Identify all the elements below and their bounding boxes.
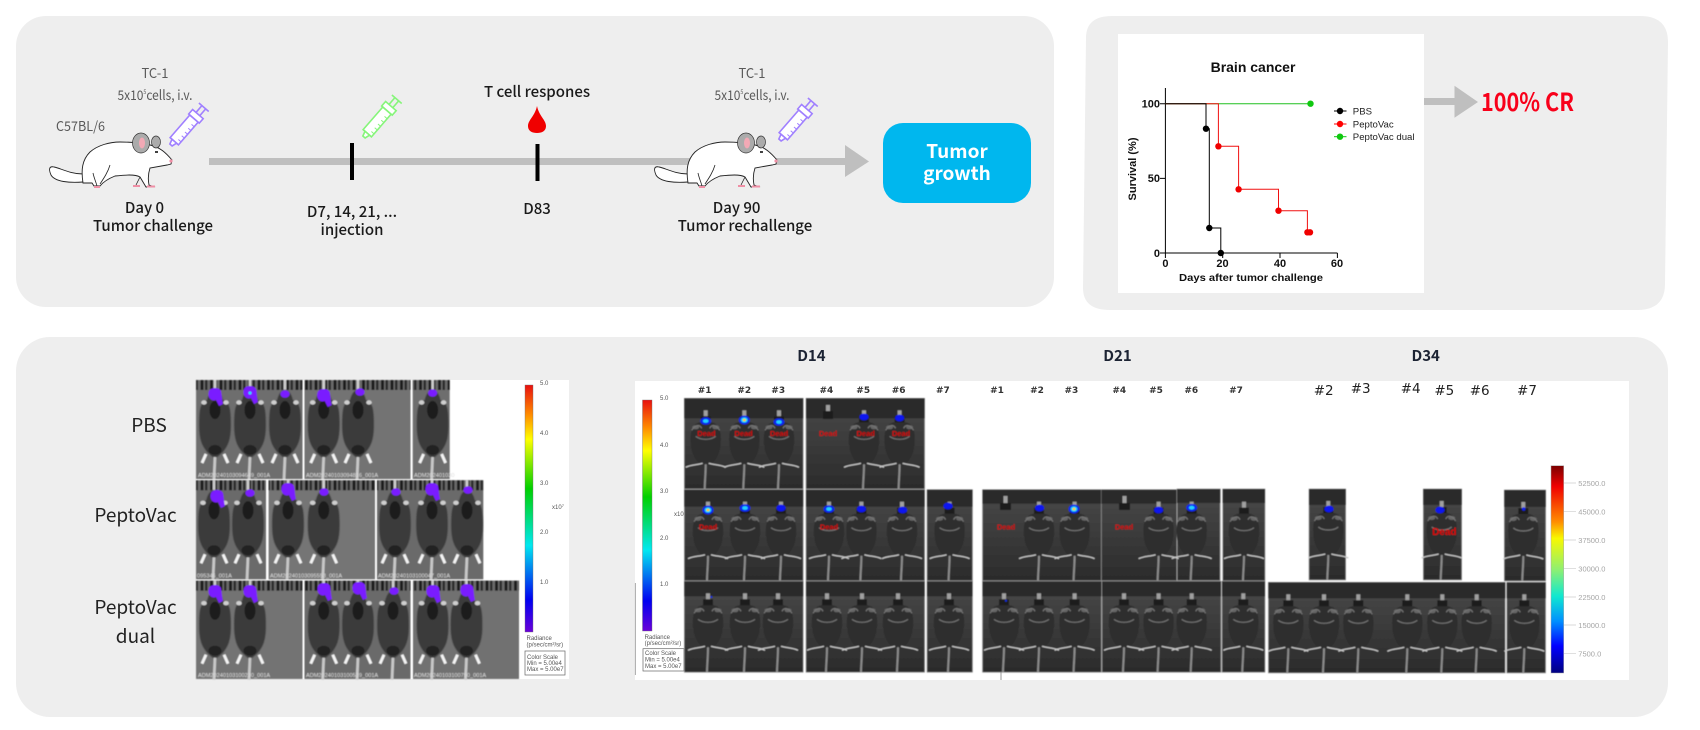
icon: mouse day 0 [50, 133, 173, 187]
color scale: left: 2.0 [660, 536, 669, 542]
icon: blood drop [528, 106, 546, 133]
color scale: radiance: 2.0 [540, 530, 549, 536]
legend: PBS [1353, 106, 1372, 118]
mouse number labels: #4 [1401, 381, 1421, 397]
frames: D14 PeptoVac: Dead [820, 522, 839, 532]
legend: PeptoVac [1353, 120, 1394, 130]
mouse number labels: #2 [1030, 386, 1044, 396]
color scale: right: 45000.0 [1578, 508, 1605, 516]
y tick labels: 50 [1148, 173, 1160, 185]
color scale: left: Max = 5.00e7 [645, 664, 682, 670]
frames: D21 PeptoVac dual [982, 581, 1265, 672]
mouse number labels: #2 [1314, 383, 1334, 399]
y tick labels: 100 [1142, 98, 1160, 110]
label: dose day 0: 5 [143, 87, 146, 96]
mouse number labels: #7 [1517, 383, 1537, 399]
survival chart [1118, 34, 1424, 293]
color scale: right: 52500.0 [1578, 479, 1605, 488]
frames: D21 PeptoVac [982, 489, 1265, 581]
label: day 0: Day 0 [125, 197, 164, 218]
label: day 90: Tumor rechallenge [678, 215, 812, 236]
panel: survival result [1083, 16, 1668, 310]
label: dose day 90: 5 [740, 87, 743, 96]
y axis label: Survival (%) [1127, 137, 1139, 200]
heading: D34: D34 [1411, 345, 1440, 366]
mouse number labels: #6 [892, 386, 906, 396]
label: injection schedule [307, 201, 397, 240]
color scale: radiance: Color Scale [527, 655, 559, 661]
frames: D14 PBS: Dead [770, 429, 789, 438]
legend [1334, 106, 1415, 143]
label: TC-1 day 90: TC-1 [738, 62, 766, 82]
color scale: left: 3.0 [660, 489, 669, 495]
y tick labels: 0 [1154, 248, 1160, 260]
frames: D34 PeptoVac [1308, 489, 1546, 581]
color scale: radiance: 7 [562, 503, 565, 508]
mouse number labels: #3 [1351, 381, 1371, 397]
frames: D14 PeptoVac: Dead [699, 522, 718, 532]
legend: PeptoVac dual [1353, 132, 1415, 143]
mice images: D34 [1268, 489, 1546, 673]
arrow to result [1424, 86, 1478, 118]
mouse number labels: #4 [1112, 386, 1126, 396]
color scale: radiance: Min = 5.00e4 [527, 661, 563, 667]
frames: D14 PBS: Dead [697, 429, 716, 438]
color scale: radiance: Radiance [526, 636, 553, 642]
x axis label: Days after tumor challenge [1179, 272, 1323, 284]
mouse number labels: #3 [1064, 386, 1078, 396]
mouse number labels: #5 [856, 386, 870, 396]
color scale: radiance: (p/sec/cm²/sr) [526, 642, 563, 648]
callout: tumor growth: Tumor [926, 137, 988, 164]
color scale: left: Radiance [645, 635, 671, 641]
label: dose day 90: cells, i.v. [743, 84, 790, 104]
frames: D14 PBS: Dead [734, 429, 753, 438]
group label: PeptoVac dual: PeptoVac [94, 593, 177, 620]
image: longitudinal imaging [635, 381, 1629, 680]
frames: PeptoVac dual row: ADM20240103100750_001A [414, 673, 486, 679]
group label: PeptoVac: PeptoVac [94, 501, 177, 528]
frames: D14 PBS: Dead [857, 429, 875, 438]
x tick labels: 40 [1274, 258, 1286, 270]
mouse number labels: #6 [1470, 383, 1490, 399]
color scale: right [1551, 466, 1605, 673]
group label: PeptoVac dual [94, 593, 177, 649]
x tick labels: 20 [1216, 258, 1229, 270]
icon: purple syringe day 90 [775, 98, 818, 145]
icon: purple syringe day 0 [166, 103, 209, 150]
frames: D14 PBS: Dead [892, 429, 911, 438]
heading: D14: D14 [797, 345, 826, 366]
mouse number labels: #2 [737, 386, 751, 396]
series: PeptoVac dual [1165, 100, 1314, 107]
label: TC-1 day 0: TC-1 [142, 62, 168, 82]
color scale: right: 15000.0 [1578, 621, 1605, 630]
image: day 0 imaging [196, 380, 569, 680]
frames: PeptoVac dual row: ADM20240103100539_001A [306, 673, 378, 679]
color scale: radiance: Max = 5.00e7 [527, 667, 564, 673]
color scale: left: Min = 5.00e4 [645, 658, 681, 664]
label: dose day 0: cells, i.v. [146, 84, 192, 104]
color scale: left: 1.0 [660, 582, 669, 588]
mouse number labels: #3 [771, 386, 785, 396]
color scale: radiance: 4.0 [540, 431, 549, 437]
frames: PeptoVac row: 095346_001A [197, 574, 232, 580]
frames: PeptoVac row [196, 480, 483, 580]
frames: PeptoVac dual row: ADM20240103100230_001A [198, 673, 270, 679]
result: 100% CR: 100% CR [1481, 83, 1574, 119]
mouse number labels: #6 [1184, 386, 1198, 396]
color scale: left: Color Scale [645, 651, 677, 657]
frames: PeptoVac row: ADM20240103100047_001A [378, 574, 450, 580]
series: PBS [1165, 104, 1224, 256]
mouse number labels [698, 381, 1537, 399]
label: day 90: Day 90 [713, 197, 760, 218]
mouse number labels: #5 [1434, 383, 1454, 399]
label: day 90 [678, 197, 812, 236]
group label: PeptoVac dual: dual [116, 622, 155, 649]
color scale: radiance [525, 381, 565, 675]
label: strain: C57BL/6 [56, 115, 105, 135]
color scale: radiance: x10 [552, 505, 562, 511]
frames: PBS row [196, 380, 454, 479]
axes [1160, 88, 1337, 258]
mouse number labels: #7 [1229, 386, 1243, 396]
heading: D21: D21 [1103, 345, 1132, 366]
frames: D14 PBS [684, 398, 925, 489]
mouse number labels: #4 [819, 386, 833, 396]
mice images: D21 [982, 489, 1265, 672]
group label: PBS: PBS [131, 411, 167, 438]
x tick labels: 60 [1331, 258, 1343, 270]
callout: tumor growth: growth [923, 159, 991, 186]
color scale: left: 4.0 [660, 443, 669, 449]
color scale: right: 22500.0 [1578, 593, 1605, 602]
mouse number labels: #1 [698, 386, 712, 396]
frames: PeptoVac row: ADM20240103095553_001A [270, 574, 342, 580]
chart title: Brain cancer [1211, 59, 1296, 75]
color scale: left: 5.0 [660, 396, 669, 402]
mouse number labels: #7 [936, 386, 950, 396]
y tick labels [1142, 98, 1160, 260]
frames: D34 PeptoVac dual [1268, 582, 1546, 673]
mice images [196, 380, 519, 680]
frames: PBS row: ADM202401030 [414, 473, 454, 479]
label: D83: D83 [523, 198, 551, 219]
series: PeptoVac [1165, 104, 1313, 236]
label: dose day 0: 5x10 [118, 84, 147, 104]
tick: T cell response [536, 144, 540, 181]
frames: D14 PeptoVac [684, 490, 972, 581]
frames: D21 PeptoVac: Dead [1115, 522, 1134, 532]
label: T cell response: T cell respones [484, 81, 590, 102]
color scale: right: 37500.0 [1578, 536, 1605, 545]
x tick labels [1162, 258, 1343, 270]
color scale: left: (p/sec/cm²/sr) [645, 641, 681, 647]
label: dose day 90: 5x10 [714, 84, 744, 104]
mouse number labels: #5 [1149, 386, 1163, 396]
frames: D14 PBS: Dead [819, 429, 838, 438]
panel: experiment timeline [16, 16, 1054, 307]
label: injection schedule: injection [321, 219, 383, 240]
tick: injection [350, 143, 354, 180]
label: injection schedule: D7, 14, 21, ... [307, 201, 397, 222]
frames: PeptoVac dual row [196, 581, 519, 680]
icon: green syringe [359, 95, 402, 142]
frames: PBS row: ADM20240103094816_001A [306, 473, 378, 479]
color scale: radiance: 5.0 [540, 381, 549, 387]
color scale: radiance: 1.0 [540, 580, 549, 586]
timeline arrow [209, 145, 869, 177]
mouse number labels: #1 [990, 386, 1004, 396]
frames: D14 PeptoVac dual [684, 581, 972, 672]
mice images: D14 [684, 398, 972, 672]
frames: D21 PeptoVac: Dead [997, 522, 1016, 532]
color scale: left: x10 [674, 512, 684, 518]
color scale: radiance: 3.0 [540, 481, 549, 487]
color scale: right: 30000.0 [1578, 564, 1605, 574]
panel: bioluminescence imaging [16, 337, 1668, 717]
x tick labels: 0 [1162, 258, 1168, 270]
icon: mouse day 90 [655, 133, 778, 187]
callout: tumor growth [883, 123, 1031, 203]
color scale: left [635, 396, 1001, 680]
frames: D34 PeptoVac: Dead [1432, 527, 1457, 538]
frames: PBS row: ADM20240103094649_001A [198, 473, 270, 479]
color scale: right: 7500.0 [1578, 650, 1601, 658]
label: day 0: Tumor challenge [93, 215, 213, 236]
label: day 0 [93, 197, 213, 236]
